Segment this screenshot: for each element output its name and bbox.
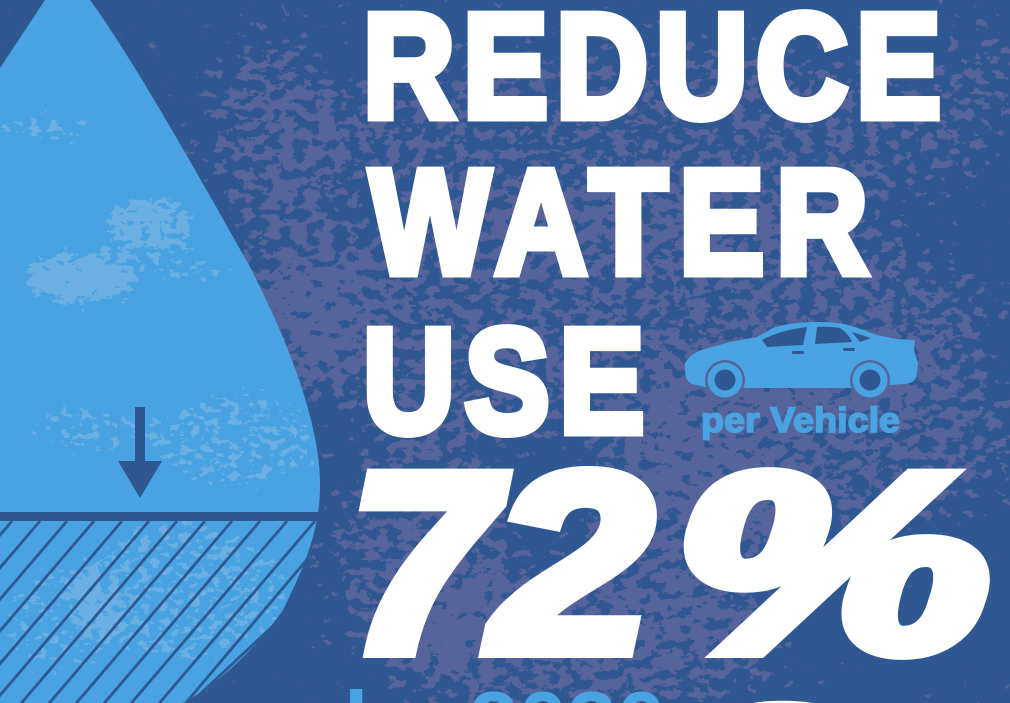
logo: oval (cropped at bottom) — [753, 701, 812, 703]
title: REDUCE WATER USE: USE — [363, 299, 644, 464]
hatched reduced-water area — [0, 521, 315, 703]
water drop — [0, 0, 320, 703]
by 2030 (cropped at bottom) — [344, 673, 666, 703]
water level line — [0, 512, 318, 521]
big number: 72%: 7 — [349, 421, 505, 703]
big number: 72% — [349, 421, 990, 703]
down arrow — [118, 407, 162, 498]
drop shape — [0, 0, 320, 703]
per Vehicle label: per Vehicle — [701, 401, 900, 440]
big number: 72%: % — [674, 421, 990, 703]
drop mottling — [0, 110, 320, 680]
big number: 72%: 2 — [487, 421, 652, 703]
title: REDUCE WATER USE — [363, 0, 941, 464]
icon: car — [685, 322, 918, 400]
title: REDUCE WATER USE: WATER — [370, 140, 868, 305]
